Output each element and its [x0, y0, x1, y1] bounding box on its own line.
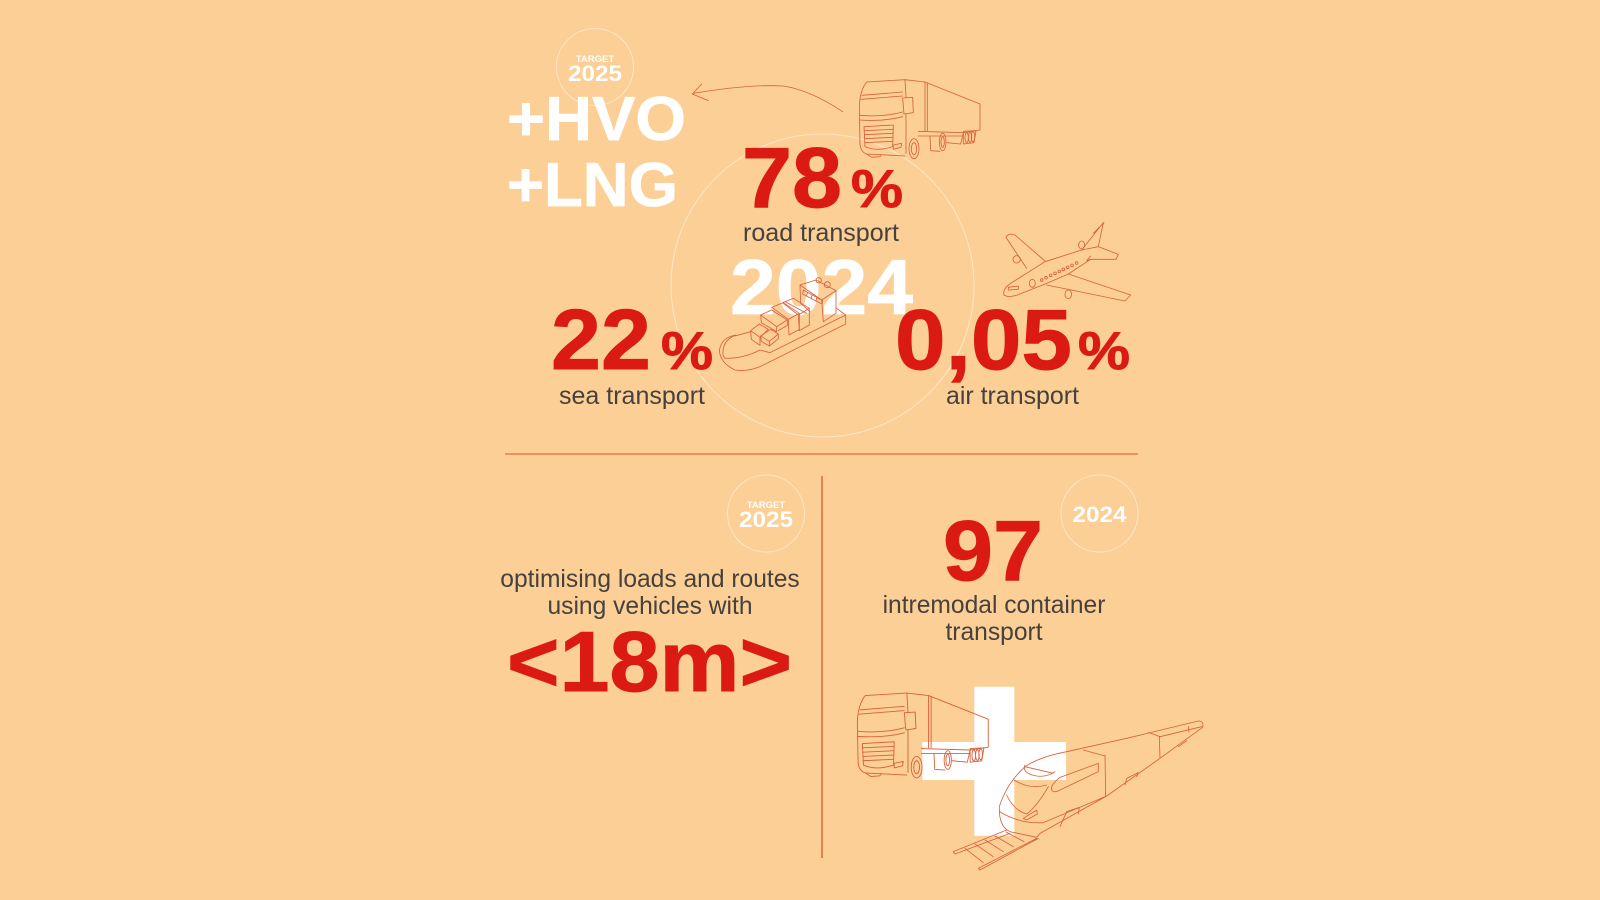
icon: plane — [1004, 223, 1131, 301]
stat: <18m>: <18m> — [507, 615, 792, 710]
arrow: truck to fuels — [692, 84, 843, 112]
badge: target 2025 (bottom) — [728, 475, 804, 552]
text: optimising loads and routes: optimising loads and routes — [500, 566, 800, 593]
badge: target 2025 (top): 2025 — [568, 61, 622, 86]
badge: 2024: 2024 — [1072, 502, 1127, 527]
stat: 78% road transport: road transport — [743, 220, 899, 247]
heading: +HVO +LNG: +HVO — [507, 85, 686, 154]
stat: 97 intermodal container transport — [883, 504, 1105, 646]
text: optimising loads and routes: using vehicles with — [547, 593, 753, 620]
badge: target 2025 (top) — [556, 28, 634, 106]
stat: 97 intermodal container transport: transport — [945, 619, 1043, 646]
stat: 22% sea transport: % — [661, 322, 713, 381]
stat: 22% sea transport: 22 — [551, 293, 651, 388]
stat: 0,05% air transport: air transport — [946, 383, 1079, 410]
large 2024 ring — [671, 134, 974, 437]
divider: vertical — [821, 476, 823, 858]
stat: 78% road transport — [742, 131, 903, 247]
stat: 97 intermodal container transport: intremodal container — [883, 592, 1105, 619]
icon: white plus — [922, 687, 1066, 836]
icon: truck — [859, 80, 980, 159]
stat: 22% sea transport — [551, 293, 713, 410]
stat: 0,05% air transport — [895, 293, 1130, 410]
stat: 97 intermodal container transport: 97 — [943, 504, 1043, 599]
heading: +HVO +LNG — [507, 85, 686, 220]
stat: 0,05% air transport: % — [1078, 322, 1130, 381]
stat: 0,05% air transport: 0,05 — [895, 293, 1072, 388]
badge: 2024 — [1061, 475, 1138, 552]
icon: train on rails — [953, 721, 1203, 870]
text: optimising loads and routes — [500, 566, 800, 620]
badge: target 2025 (bottom): 2025 — [739, 507, 793, 532]
year label: 2024: 2024 — [730, 243, 913, 331]
badge: target 2025 (bottom): TARGET — [747, 500, 785, 511]
stat: 22% sea transport: sea transport — [559, 383, 705, 410]
badge: target 2025 (top): TARGET — [576, 54, 614, 65]
icon: truck (intermodal) — [857, 693, 988, 778]
icon: container ship — [719, 278, 846, 371]
stat: 78% road transport: 78 — [742, 131, 842, 226]
heading: +HVO +LNG: +LNG — [507, 151, 678, 220]
stat: 78% road transport: % — [851, 160, 903, 219]
divider: horizontal — [505, 453, 1138, 455]
